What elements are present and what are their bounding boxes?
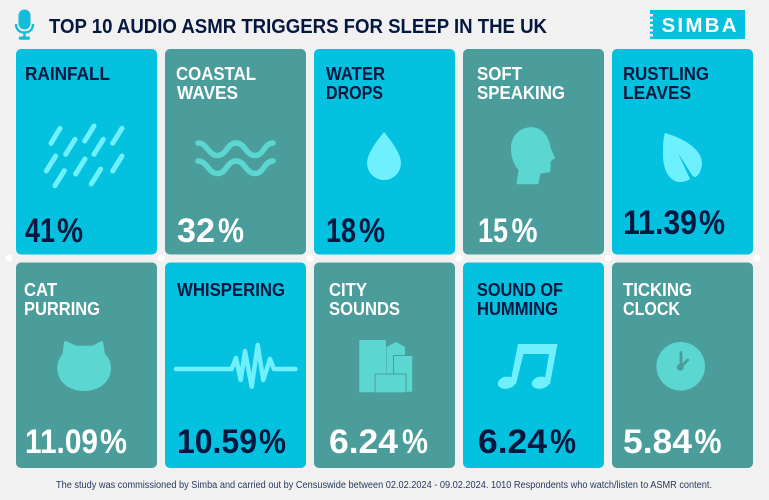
icon: rain xyxy=(46,126,122,186)
stat: 6.24% city: 6.24 xyxy=(329,423,398,461)
heading: water drops: WATER xyxy=(326,64,385,84)
stat: 18%: 18 xyxy=(326,212,356,250)
heading: coastal waves: WAVES xyxy=(177,83,238,103)
stat: 11.09%: % xyxy=(100,423,127,461)
heading: cat purring: PURRING xyxy=(24,299,100,319)
icon: music note xyxy=(497,344,558,390)
icon: waves xyxy=(198,143,273,174)
icon: head xyxy=(511,127,555,184)
stat: 41%: % xyxy=(57,212,83,250)
stat: 41%: 41 xyxy=(25,212,55,250)
heading: coastal waves: COASTAL xyxy=(176,64,256,84)
heading: sound of humming: SOUND OF xyxy=(477,280,563,300)
panel: rainfall xyxy=(16,49,157,254)
heading: rustling leaves: LEAVES xyxy=(623,83,691,103)
panel: water drops xyxy=(314,49,455,254)
logo: Simba xyxy=(650,10,745,39)
heading: water drops: DROPS xyxy=(326,83,383,103)
heading: rainfall: RAINFALL xyxy=(25,64,110,84)
heading: city sounds: SOUNDS xyxy=(329,299,400,319)
stat: 5.84%: % xyxy=(694,423,722,461)
title: TOP 10 AUDIO ASMR TRIGGERS FOR SLEEP IN THE UK xyxy=(49,15,547,38)
panel: coastal waves xyxy=(165,49,306,254)
stat: 32%: % xyxy=(218,212,244,250)
footnote: The study was commissioned by Simba and carried out by Censuswide between 02.02.2024 - 09.02.2024. 1010 Respondents who watch/listen to ASMR content. xyxy=(56,480,712,491)
panel: cat purring xyxy=(16,262,157,468)
heading: cat purring: CAT xyxy=(24,280,57,300)
stat: 6.24% humming: % xyxy=(550,423,576,461)
stat: 11.39%: 11.39 xyxy=(623,204,697,242)
icon: sound wave xyxy=(176,345,296,387)
stat: 11.09%: 11.09 xyxy=(25,423,98,461)
heading: city sounds: CITY xyxy=(329,280,367,300)
icon: clock xyxy=(656,342,705,391)
icon: cat xyxy=(57,341,111,391)
stat: 5.84%: 5.84 xyxy=(623,423,692,461)
panel: sound of humming xyxy=(463,262,604,468)
heading: sound of humming: HUMMING xyxy=(477,299,558,319)
stat: 6.24% city: % xyxy=(402,423,428,461)
heading: soft speaking: SOFT xyxy=(477,64,522,84)
logo: Simba: SIMBA xyxy=(662,14,737,37)
heading: rustling leaves: RUSTLING xyxy=(623,64,709,84)
stat: 6.24% humming: 6.24 xyxy=(478,423,547,461)
panel: city sounds xyxy=(314,262,455,468)
heading: ticking clock: TICKING xyxy=(623,280,692,300)
heading: whispering: WHISPERING xyxy=(177,280,285,300)
stat: 15%: 15 xyxy=(478,212,508,250)
panel: whispering xyxy=(165,262,306,468)
panel: soft speaking xyxy=(463,49,604,254)
heading: soft speaking: SPEAKING xyxy=(477,83,565,103)
stat: 18%: % xyxy=(359,212,385,250)
stat: 15%: % xyxy=(512,212,538,250)
heading: ticking clock: CLOCK xyxy=(623,299,680,319)
icon: microphone xyxy=(16,10,33,40)
stat: 32%: 32 xyxy=(177,212,215,250)
icon: water drop xyxy=(367,132,401,180)
stat: 10.59%: % xyxy=(259,423,286,461)
stat: 10.59%: 10.59 xyxy=(177,423,257,461)
panel: ticking clock xyxy=(612,262,753,468)
icon: city buildings xyxy=(359,340,413,393)
panel: rustling leaves xyxy=(612,49,753,254)
icon: leaf xyxy=(663,133,702,182)
stat: 11.39%: % xyxy=(699,204,725,242)
